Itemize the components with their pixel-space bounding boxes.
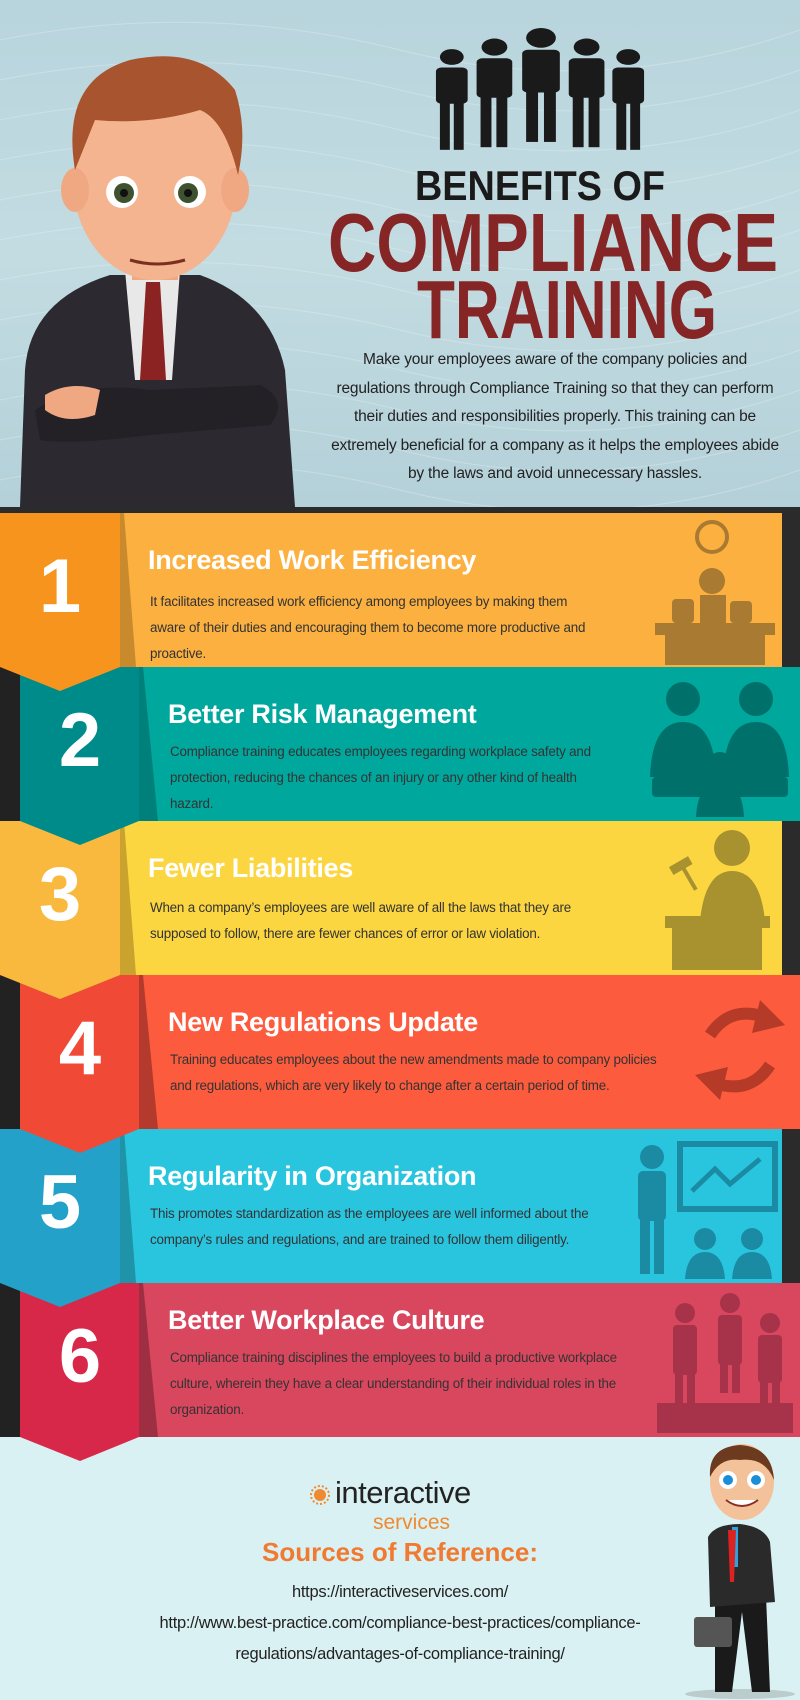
illustration: businessman with crossed arms [20, 56, 295, 507]
heading: Fewer Liabilities [148, 853, 353, 883]
description [170, 1350, 617, 1417]
reference links: https://interactiveservices.com/ [292, 1583, 508, 1601]
description: supposed to follow, there are fewer chances of error or law violation. [150, 926, 540, 941]
panel 3 [0, 821, 782, 999]
icon: judge with gavel [665, 830, 770, 970]
icon: group of business people silhouettes [436, 28, 644, 150]
panel 2 [0, 667, 800, 845]
icon: clock and desk worker [655, 520, 775, 665]
reference links: regulations/advantages-of-compliance-training/ [235, 1645, 565, 1663]
description: company’s rules and regulations, and are trained to follow them diligently. [150, 1232, 569, 1247]
intro paragraph: Make your employees aware of the company policies and [363, 351, 747, 368]
heading: Regularity in Organization [148, 1161, 476, 1191]
panel 5 [0, 1129, 782, 1307]
icon: presenter with board [638, 1141, 778, 1279]
description: culture, wherein they have a clear understanding of their individual roles in the [170, 1376, 616, 1391]
logo: interactive services: services [373, 1511, 450, 1534]
description: and regulations, which are very likely to change after a certain period of time. [170, 1078, 610, 1093]
description [150, 900, 571, 941]
heading: Better Risk Management [168, 699, 476, 729]
description: This promotes standardization as the employees are well informed about the [150, 1206, 588, 1221]
heading: sources of reference: Sources of Reference: [262, 1537, 538, 1567]
description: protection, reducing the chances of an injury or any other kind of health [170, 770, 577, 785]
intro paragraph: their duties and responsibilities properly. This training can be [354, 408, 756, 425]
heading: Increased Work Efficiency [148, 545, 476, 575]
footer section [0, 1437, 800, 1700]
title [328, 162, 778, 345]
number 5: 5 [39, 1160, 81, 1245]
icon: people on podium [657, 1293, 793, 1433]
description [170, 744, 591, 811]
number 4: 4 [59, 1006, 101, 1091]
description: organization. [170, 1402, 244, 1417]
number 6: 6 [59, 1314, 101, 1399]
panel 4 [0, 975, 800, 1153]
intro paragraph [331, 351, 779, 482]
description: Compliance training educates employees regarding workplace safety and [170, 744, 591, 759]
heading: New Regulations Update [168, 1007, 478, 1037]
number 2: 2 [59, 698, 101, 783]
intro paragraph: extremely beneficial for a company as it helps the employees abide [331, 436, 779, 454]
description: It facilitates increased work efficiency among employees by making them [150, 594, 567, 609]
intro paragraph: by the laws and avoid unnecessary hassles. [408, 465, 702, 482]
icon: meeting people [650, 682, 789, 817]
description: When a company’s employees are well aware of all the laws that they are [150, 900, 571, 915]
description: proactive. [150, 646, 206, 661]
panel 6 [0, 1283, 800, 1461]
heading: Better Workplace Culture [168, 1305, 484, 1335]
logo: interactive services [310, 1475, 471, 1534]
description: aware of their duties and encouraging them to become more productive and [150, 620, 585, 635]
number 3: 3 [39, 852, 81, 937]
icon: refresh arrows [695, 1000, 785, 1100]
logo: interactive services: interactive [335, 1475, 471, 1510]
description [150, 594, 585, 661]
number 1: 1 [39, 544, 81, 629]
illustration: cartoon businessman with briefcase [685, 1444, 795, 1699]
panel 1 [0, 513, 782, 691]
title: BENEFITS OF [415, 162, 665, 209]
intro paragraph: regulations through Compliance Training so that they can perform [337, 380, 773, 396]
description [170, 1052, 657, 1093]
description: hazard. [170, 796, 213, 811]
reference links: http://www.best-practice.com/compliance-best-practices/compliance- [160, 1614, 640, 1632]
description: Training educates employees about the new amendments made to company policies [170, 1052, 657, 1067]
header section [0, 0, 800, 507]
reference links [160, 1583, 640, 1663]
description: Compliance training disciplines the employees to build a productive workplace [170, 1350, 617, 1365]
description [150, 1206, 588, 1247]
